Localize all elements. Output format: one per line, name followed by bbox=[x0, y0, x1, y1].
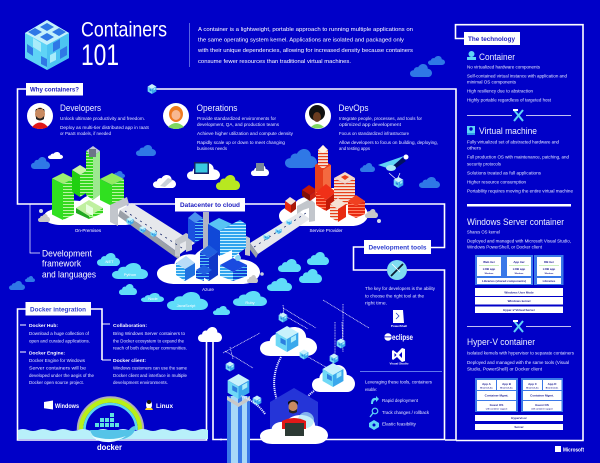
heading: development framework and languages: and languages bbox=[42, 270, 96, 280]
hyper-v diagram: Binaries/Libs bbox=[526, 388, 540, 390]
panel: the technology frame bbox=[456, 25, 583, 440]
label: the technology: The technology bbox=[468, 36, 516, 43]
leveraging tools text: enable: bbox=[365, 387, 377, 393]
windows server diagram: Hyper-V Virtual Server bbox=[503, 308, 536, 312]
icon: powershell tile: PowerShell bbox=[391, 324, 407, 328]
virtual machine section: Portability requires moving the entire virtual machine bbox=[467, 188, 574, 194]
heading: development framework and languages bbox=[42, 248, 96, 280]
language clouds bbox=[97, 252, 329, 315]
windows logo bbox=[44, 400, 80, 410]
operations block: business needs bbox=[197, 146, 227, 151]
virtual machine section: Solutions treated as full applications bbox=[467, 170, 541, 176]
hyper-v container section: Studio, PowerShell) or Docker client bbox=[467, 366, 543, 372]
windows server diagram: Windows kernel bbox=[508, 299, 531, 303]
windows server diagram: Libraries (shared components) bbox=[482, 279, 526, 283]
development tools text: right time. bbox=[365, 300, 387, 306]
hyper-v diagram: App D bbox=[548, 382, 557, 386]
devops block: and testing apps bbox=[339, 146, 370, 151]
hyper-v diagram: App B bbox=[502, 382, 512, 386]
container section: No virtualized hardware components bbox=[467, 64, 540, 70]
virtual machine section: Full production OS with maintenance, patching, and bbox=[467, 154, 570, 160]
docker client text: Docker client and interface in multiple bbox=[113, 373, 187, 379]
cloud with cube 2 bbox=[312, 338, 355, 392]
docker wordmark: docker bbox=[97, 443, 122, 452]
virtual machine section: others bbox=[467, 146, 481, 150]
intro text: consume fewer resources than traditional virtual machines. bbox=[198, 59, 351, 65]
panel: development tools frame bbox=[220, 204, 444, 440]
title bbox=[81, 18, 167, 72]
developers block: Deploy as multi-tier distributed app in IaaS bbox=[60, 125, 149, 130]
virtual machine section: Higher resource consumption bbox=[467, 180, 527, 184]
developers block: Developers bbox=[60, 103, 101, 114]
label: datacenter to cloud bbox=[175, 198, 245, 212]
operations block: Rapidly scale up or down to meet changing bbox=[197, 140, 286, 145]
hyper-v diagram bbox=[475, 378, 563, 430]
windows server diagram: LOB app bbox=[513, 267, 525, 271]
cloud: on-premises bbox=[38, 193, 141, 233]
windows server container section: Windows PowerShell, or Docker client bbox=[467, 244, 543, 250]
buildings: blue azure bbox=[176, 212, 247, 281]
container section: minimal OS components bbox=[467, 80, 516, 84]
benefit: track changes bbox=[370, 408, 430, 417]
label: the technology bbox=[464, 32, 520, 45]
label: development tools: Development tools bbox=[368, 244, 427, 252]
docker whale bbox=[90, 413, 136, 442]
icon: container cube logo bbox=[25, 20, 69, 70]
buildings: red service provider bbox=[285, 145, 365, 222]
benefit: rapid deployment: Rapid deployment bbox=[382, 398, 419, 404]
windows server diagram: Windows bbox=[515, 273, 524, 275]
label: datacenter to cloud: Datacenter to cloud bbox=[180, 202, 240, 209]
docker client text bbox=[113, 358, 187, 386]
hyper-v diagram: App A bbox=[482, 382, 492, 386]
collaboration text: Collaboration: bbox=[113, 323, 147, 329]
language clouds: JavaScript bbox=[177, 303, 196, 308]
cloud: service provider bbox=[279, 188, 381, 233]
docker engine text: Docker Engine for Windows bbox=[29, 358, 86, 364]
cloud: service provider: Service Provider bbox=[309, 228, 343, 233]
docker hub text: Download a huge collection of bbox=[29, 331, 90, 337]
windows server container section: Shares OS kernel bbox=[467, 230, 500, 234]
windows server diagram: DB tier bbox=[544, 260, 555, 264]
intro text bbox=[197, 27, 413, 65]
linux logo bbox=[145, 400, 173, 410]
hyper-v diagram: Guest OS bbox=[490, 403, 503, 407]
leveraging tools text bbox=[365, 380, 433, 393]
windows server diagram: Web tier bbox=[483, 260, 496, 264]
title: 101 bbox=[81, 39, 119, 72]
divider with tools icon 2 bbox=[467, 321, 571, 332]
virtual machine section: Virtual machine bbox=[479, 126, 537, 137]
docker hub text: open and curated applications. bbox=[29, 338, 90, 344]
small cubes bbox=[226, 362, 261, 406]
icon: powershell tile bbox=[391, 310, 407, 328]
hyper-v diagram: Server bbox=[514, 425, 525, 429]
windows server container section: Deployed and managed with Microsoft Visual Studio, bbox=[467, 238, 571, 244]
hyper-v container section: Isolated kernels with hypervisor to separate containers bbox=[467, 350, 574, 356]
benefit: elastic scalability bbox=[369, 420, 417, 430]
panel: docker integration frame bbox=[18, 309, 222, 440]
cloud: azure bbox=[157, 245, 264, 292]
developers block: or PaaS models, if needed bbox=[60, 131, 112, 136]
tower with cloud top bbox=[198, 327, 222, 342]
language clouds: Python bbox=[124, 272, 136, 277]
linux logo: Linux bbox=[156, 403, 173, 410]
docker hub text bbox=[29, 323, 90, 344]
leveraging tools text: Leveraging these tools, containers bbox=[365, 380, 433, 386]
hyper-v diagram: Hypervisor bbox=[511, 416, 528, 420]
docker client text: Windows customers can use the same bbox=[113, 366, 187, 372]
operations block: Achieve higher utilization and compute density bbox=[197, 131, 294, 136]
docker client text: development environments. bbox=[113, 380, 168, 386]
icon: visual studio bbox=[390, 348, 409, 366]
heading: development framework and languages: framework bbox=[42, 258, 81, 270]
icon: small cube on frame bbox=[148, 84, 156, 94]
devops block: Focus on standardized infrastructure bbox=[339, 131, 410, 136]
operations block: Operations bbox=[196, 103, 238, 114]
docker client text: Docker client: bbox=[113, 358, 146, 364]
hyper-v diagram: Container Mgmt. bbox=[485, 394, 508, 398]
container section: Highly portable regardless of targeted host bbox=[467, 98, 552, 102]
collaboration text: the Docker ecosystem to expand the bbox=[113, 338, 184, 344]
divider with tools icon bbox=[467, 110, 571, 121]
benefit: rapid deployment bbox=[371, 396, 419, 404]
container section: High resiliency due to abstraction bbox=[467, 88, 534, 94]
hyper-v diagram: Guest OS bbox=[535, 403, 549, 407]
hyper-v diagram: App C bbox=[528, 382, 538, 386]
antenna dashed lines bbox=[223, 300, 369, 370]
icon: eclipse: eclipse bbox=[392, 333, 413, 342]
hyper-v container section: Hyper-V container bbox=[467, 337, 535, 348]
microsoft logo: Microsoft bbox=[563, 448, 584, 454]
windows server diagram: App tier bbox=[513, 260, 525, 264]
label: docker integration bbox=[26, 302, 91, 316]
operations block bbox=[163, 103, 294, 151]
docker rainbow bbox=[78, 398, 143, 430]
devops block: Integrate people, processes, and tools for bbox=[339, 116, 423, 121]
icon: tools circle bbox=[387, 260, 407, 280]
hyper-v diagram: Binaries/Libs bbox=[546, 388, 559, 390]
devops block: Allow developers to focus on building, deploying, bbox=[339, 140, 438, 145]
intro text: the same operating system kernel. Applications are isolated and packaged only bbox=[198, 38, 404, 44]
app tile clouds bbox=[153, 162, 269, 190]
container section bbox=[467, 51, 568, 102]
container section: Self-contained virtual instance with application and bbox=[467, 74, 568, 78]
devops block bbox=[305, 103, 438, 151]
windows logo: Windows bbox=[55, 404, 80, 410]
hyper-v diagram: Binaries/Libs bbox=[480, 388, 494, 390]
operations block: development, QA, and production teams bbox=[197, 122, 279, 127]
intro text: A container is a lightweight, portable approach to running multiple applications on bbox=[198, 27, 413, 33]
hyper-v diagram: with container support bbox=[486, 408, 508, 410]
windows server diagram: LOB app bbox=[483, 267, 495, 271]
tower and cube bbox=[227, 374, 250, 463]
windows server diagram: Libraries bbox=[543, 279, 556, 283]
development tools text bbox=[365, 286, 436, 306]
development tools text: The key for developers is the ability bbox=[365, 286, 436, 292]
label: docker integration: Docker integration bbox=[30, 306, 86, 314]
docker engine text: Docker open source project. bbox=[29, 380, 84, 386]
intro text: with their unique dependencies, allowing for increased density because containers bbox=[197, 48, 413, 54]
satellite icon bbox=[378, 154, 408, 188]
binary data streams bbox=[241, 357, 314, 421]
virtual machine section bbox=[467, 126, 574, 194]
docker engine text bbox=[29, 350, 94, 386]
hyper-v diagram: Binaries/Libs bbox=[500, 388, 514, 390]
decorative header clouds bbox=[410, 56, 445, 77]
label: development tools bbox=[364, 240, 431, 254]
collaboration text bbox=[113, 323, 187, 352]
docker engine text: Server containers will be bbox=[29, 366, 86, 372]
windows server diagram: Windows User Mode bbox=[504, 290, 534, 294]
hyper-v diagram: with container support bbox=[531, 408, 553, 410]
language clouds: .NET bbox=[104, 259, 114, 264]
icon: eclipse bbox=[384, 333, 413, 342]
hyper-v container section: Deployed and managed with the same tools (Visual bbox=[467, 360, 569, 365]
cloud: on-premises: On-Premises bbox=[75, 228, 102, 233]
windows server diagram bbox=[475, 255, 564, 313]
heading: development framework and languages: Development bbox=[42, 248, 92, 260]
bridge: azure to service provider bbox=[234, 199, 315, 258]
windows server container section bbox=[467, 217, 571, 313]
buildings: green on-premises bbox=[52, 146, 124, 220]
docker hub text: Docker Hub: bbox=[29, 323, 58, 329]
benefit: elastic scalability: Elastic feasibility bbox=[382, 422, 417, 428]
developers block: Unlock ultimate productivity and freedom. bbox=[60, 116, 145, 121]
operations block: Provide standardized environments for bbox=[197, 116, 277, 121]
cloud with monitor bbox=[187, 162, 220, 180]
title: Containers bbox=[81, 18, 167, 42]
collaboration text: Bring Windows Server containers to bbox=[113, 331, 185, 337]
cloud with pc bbox=[251, 163, 269, 176]
virtual machine section: security protocols bbox=[467, 162, 501, 166]
collaboration text: reach of both developer communities. bbox=[113, 346, 187, 352]
developers block bbox=[27, 103, 149, 136]
windows server diagram: Windows bbox=[545, 273, 554, 275]
devops block: optimized app development bbox=[339, 122, 402, 127]
label: why containers bbox=[26, 83, 83, 96]
docker engine text: developed under the aegis of the bbox=[29, 373, 94, 379]
language clouds: Node bbox=[148, 296, 159, 301]
panel: why containers frame bbox=[18, 84, 456, 440]
small white cloud bbox=[48, 152, 63, 159]
development tools text: to choose the right tool at the bbox=[365, 294, 424, 300]
container section: Container bbox=[479, 52, 515, 63]
icon: visual studio: Visual Studio bbox=[390, 362, 409, 366]
virtual machine section: Fully virtualized set of abstracted hardware and bbox=[467, 140, 560, 144]
cloud with cube 1 bbox=[260, 312, 317, 360]
docker engine text: Docker Engine: bbox=[29, 350, 65, 356]
bridge: on-premises to azure bbox=[110, 197, 195, 259]
label: why containers: Why containers? bbox=[30, 86, 79, 94]
microsoft logo bbox=[555, 446, 584, 454]
hyper-v container section bbox=[467, 337, 574, 430]
cloud: azure: Azure bbox=[202, 287, 214, 292]
windows server diagram: Windows bbox=[485, 273, 494, 275]
windows server container section: Windows Server container bbox=[467, 217, 564, 228]
developer on cloud bbox=[260, 388, 328, 444]
decorative sky clouds bbox=[9, 145, 440, 290]
hyper-v diagram: Container Mgmt. bbox=[530, 394, 554, 398]
lime cloud bbox=[216, 175, 240, 190]
water waves bbox=[18, 429, 208, 439]
devops block: DevOps bbox=[338, 103, 369, 114]
benefit: track changes: Track changes / rollback bbox=[382, 410, 430, 416]
cloud with tag bbox=[153, 175, 176, 188]
windows server diagram: LOB app bbox=[543, 267, 555, 271]
language clouds: Ruby bbox=[245, 300, 255, 305]
